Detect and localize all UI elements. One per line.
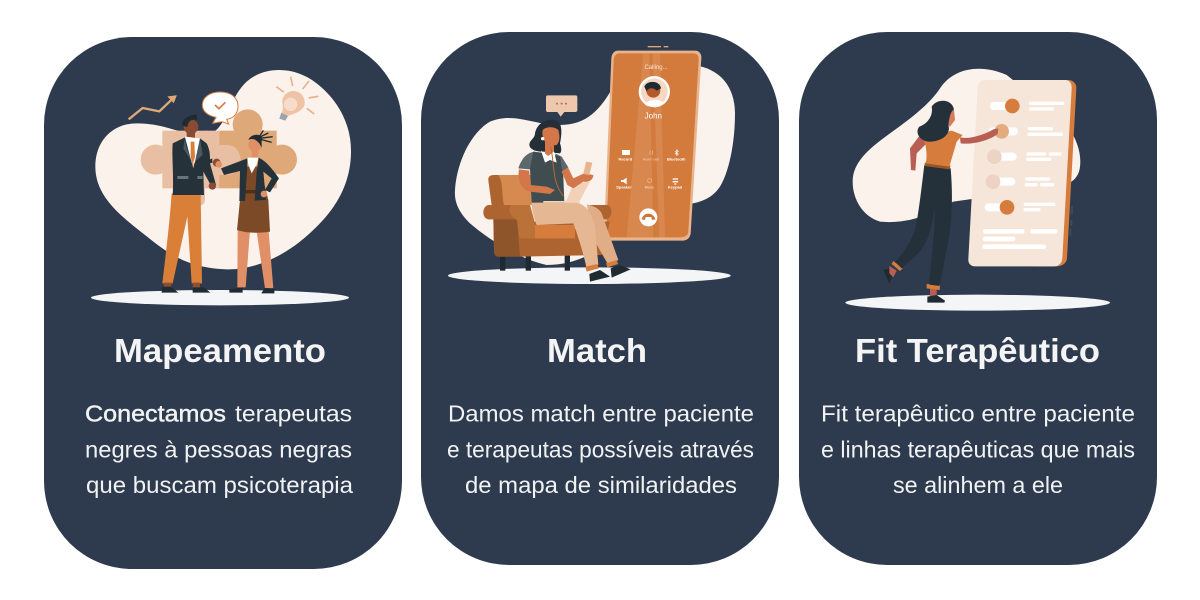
description [821, 400, 1135, 498]
illustration: woman tapping interface [845, 69, 1110, 311]
woman [215, 130, 279, 293]
speech bubble check [202, 92, 238, 124]
call buttons: Bluetooth [667, 156, 686, 161]
phone: John [645, 111, 662, 120]
blob background [853, 69, 1080, 222]
description: e terapeutas possíveis através [447, 436, 754, 462]
description: e linhas terapêuticas que mais [821, 436, 1135, 462]
ground ellipse [91, 290, 349, 305]
man [162, 114, 221, 293]
blob background [95, 70, 351, 269]
description: negres à pessoas negras [85, 436, 352, 462]
panel: Mapeamento [44, 37, 402, 569]
panel: Match [421, 32, 779, 565]
woman seated [518, 120, 631, 282]
description: de mapa de similaridades [465, 472, 737, 498]
description: terapeutas [235, 400, 352, 426]
phone [604, 46, 701, 241]
phone: Calling... [644, 64, 668, 71]
call buttons: Record [618, 156, 633, 161]
description: se alinhem a ele [893, 472, 1063, 498]
armchair [483, 175, 611, 271]
call buttons: Hold call [643, 156, 659, 161]
call buttons: Keypad [668, 185, 683, 190]
heading: Mapeamento [114, 332, 326, 369]
description: Damos match entre paciente [448, 400, 754, 426]
call buttons: Mute [645, 185, 655, 190]
light bulb [276, 77, 318, 121]
illustration: woman on phone call [448, 46, 735, 284]
description: que buscam psicoterapia [86, 472, 354, 498]
description: Fit terapêutico entre paciente [821, 400, 1135, 426]
blob background [455, 64, 735, 265]
hang up button [639, 208, 657, 226]
toggles [982, 102, 1064, 249]
heading: Fit Terapêutico [855, 332, 1100, 369]
growth arrow [129, 96, 176, 119]
woman standing [883, 101, 998, 303]
panel: Fit Terapêutico [799, 32, 1157, 565]
description [447, 400, 754, 498]
description [85, 400, 354, 498]
illustration: handshake with puzzle [91, 70, 351, 305]
ground ellipse [448, 267, 731, 284]
puzzle pieces [141, 109, 297, 206]
heading: Match [547, 332, 647, 369]
ground ellipse [845, 295, 1110, 311]
phone panel [968, 80, 1076, 266]
call buttons: Speaker [616, 185, 632, 190]
call buttons [616, 150, 686, 190]
description: Conectamos [85, 400, 226, 426]
speech bubble [546, 95, 577, 117]
